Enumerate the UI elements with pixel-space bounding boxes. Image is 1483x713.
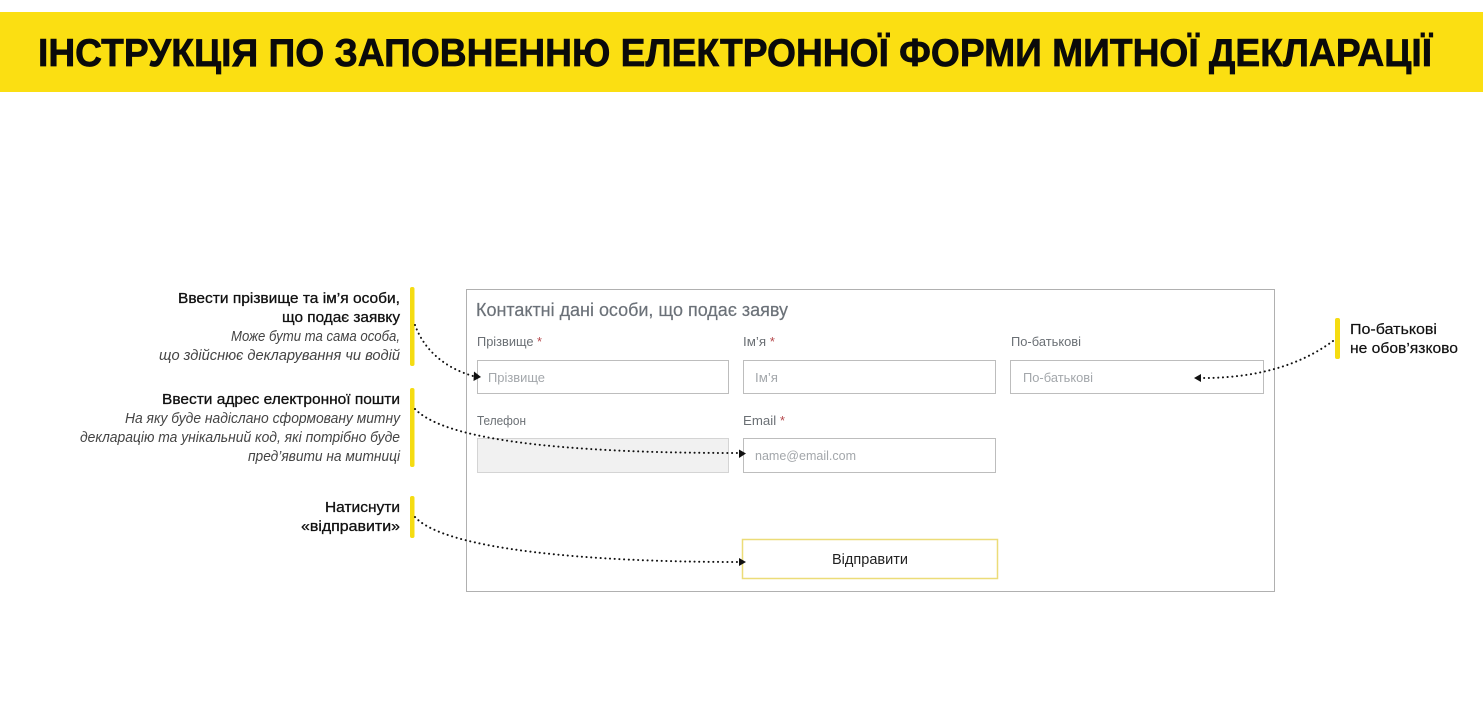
panel: contact form [466,290,1274,592]
callout: email [80,388,414,467]
callout: surname and name: що подає заявку [282,309,401,326]
submit button: Відправити [832,551,908,568]
callout: surname and name: що здійснює декларування чи водій [159,347,401,364]
callout: patronymic [1335,318,1458,359]
arrow: to surname field [415,325,481,381]
field: patronymic [1010,334,1264,394]
field: surname: Прізвище * [477,334,542,349]
field: email: name@email.com [755,448,856,463]
callout: surname and name [159,287,414,366]
callout: patronymic: не обов’язково [1350,340,1458,357]
arrow: to email field [415,409,746,458]
callout: email: декларацію та унікальний код, які потрібно буде [80,429,400,446]
arrow: to patronymic field [1194,341,1333,382]
field: email [743,413,996,472]
callout: submit: «відправити» [301,518,400,535]
callout: surname and name: Може бути та сама особа, [231,328,400,345]
field: patronymic: По-батькові [1011,334,1081,349]
form heading: Контактні дані особи, що подає заяву [476,300,788,320]
callout: email: пред’явити на митниці [248,448,401,465]
field: surname [477,334,728,394]
field: first name [743,334,996,394]
title banner [0,12,1483,92]
callout: email: На яку буде надіслано сформовану митну [125,410,401,427]
title: ІНСТРУКЦІЯ ПО ЗАПОВНЕННЮ ЕЛЕКТРОННОЇ ФОРМИ МИТНОЇ ДЕКЛАРАЦІЇ [38,32,1433,75]
field: email: Email * [743,413,785,428]
submit button [742,540,998,578]
field: first name: Ім’я * [743,334,775,349]
field: phone [477,413,728,472]
field: surname: Прізвище [488,370,545,385]
callout: submit: Натиснути [325,499,400,516]
callout: email: Ввести адрес електронної пошти [162,391,400,408]
field: phone: Телефон [477,413,526,428]
field: patronymic: По-батькові [1023,370,1093,385]
callout: patronymic: По-батькові [1350,321,1437,338]
callout: surname and name: Ввести прізвище та ім’я особи, [178,290,400,307]
arrow: to submit button [415,517,746,566]
callout: submit [301,496,414,538]
field: first name: Ім’я [755,370,778,385]
